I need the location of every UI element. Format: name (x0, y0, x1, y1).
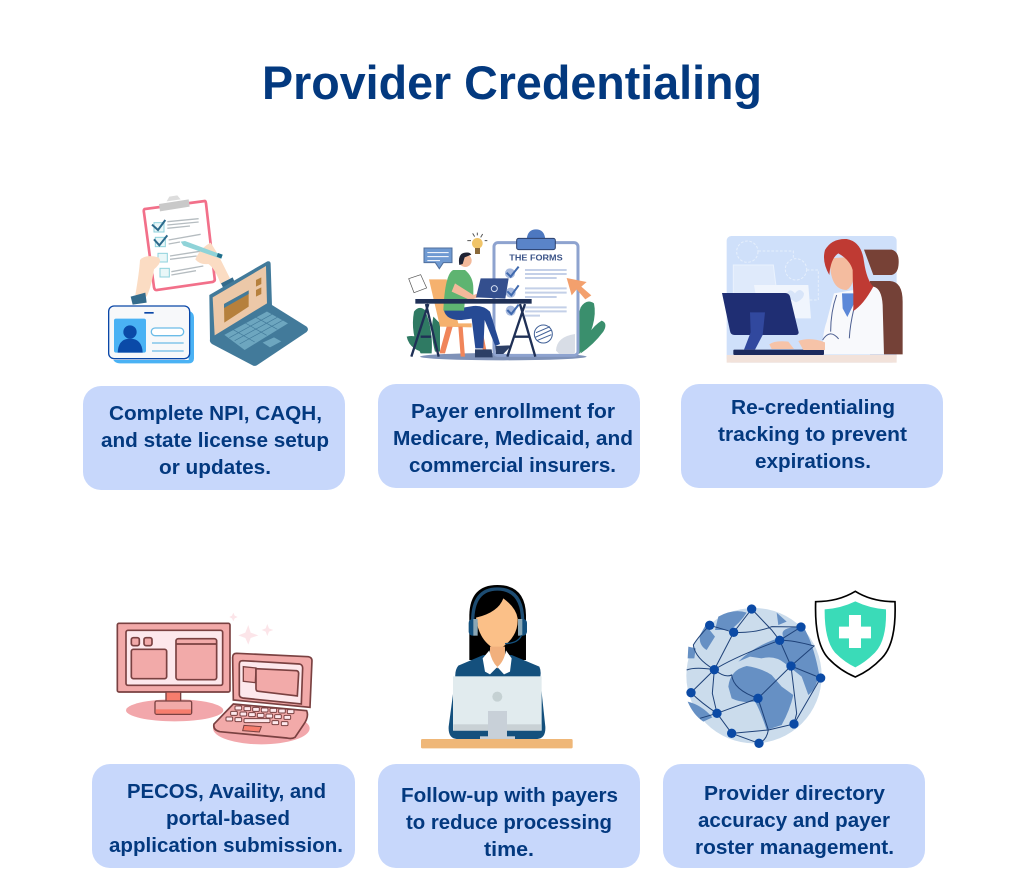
panel: NPI, CAQH and license setup: and state license setup (101, 430, 329, 452)
panel: portal-based submission (92, 764, 355, 868)
panel: directory and roster management (663, 764, 925, 868)
panel: payer follow-up: time. (484, 839, 534, 861)
title: Provider Credentialing (262, 56, 762, 109)
panel: payer follow-up (378, 764, 640, 868)
panel: re-credentialing tracking: Re-credentialing (731, 397, 895, 419)
panel: re-credentialing tracking: expirations. (755, 451, 871, 473)
panel: re-credentialing tracking: tracking to prevent (718, 424, 907, 446)
panel: directory and roster management: accuracy and payer (698, 810, 890, 832)
panel: portal-based submission: application submission. (109, 835, 343, 857)
icon: person at desk with the forms (407, 229, 605, 360)
panel: re-credentialing tracking (681, 384, 943, 488)
icon: pink monitor and laptop (117, 613, 312, 744)
panel: payer follow-up: to reduce processing (406, 812, 612, 834)
icon: person at desk with the forms: THE FORMS (509, 253, 563, 263)
icon: clipboard, ID card and laptop (109, 195, 308, 366)
panel: NPI, CAQH and license setup (83, 386, 345, 490)
panel: NPI, CAQH and license setup: or updates. (159, 457, 271, 479)
icon: network globe and medical shield (686, 591, 895, 748)
icon: support agent with headset (421, 585, 573, 748)
panel: payer follow-up: Follow-up with payers (401, 785, 618, 807)
panel: payer enrollment (378, 384, 640, 488)
icon: doctor at computer (722, 236, 903, 363)
panel: portal-based submission: portal-based (166, 808, 290, 830)
panel: payer enrollment: Medicare, Medicaid, and (393, 428, 633, 450)
panel: directory and roster management: roster management. (695, 837, 894, 859)
panel: directory and roster management: Provider directory (704, 783, 886, 805)
panel: NPI, CAQH and license setup: Complete NPI, CAQH, (109, 403, 322, 425)
panel: payer enrollment: Payer enrollment for (411, 401, 615, 423)
panel: payer enrollment: commercial insurers. (409, 455, 616, 477)
panel: portal-based submission: PECOS, Availity, and (127, 781, 326, 803)
